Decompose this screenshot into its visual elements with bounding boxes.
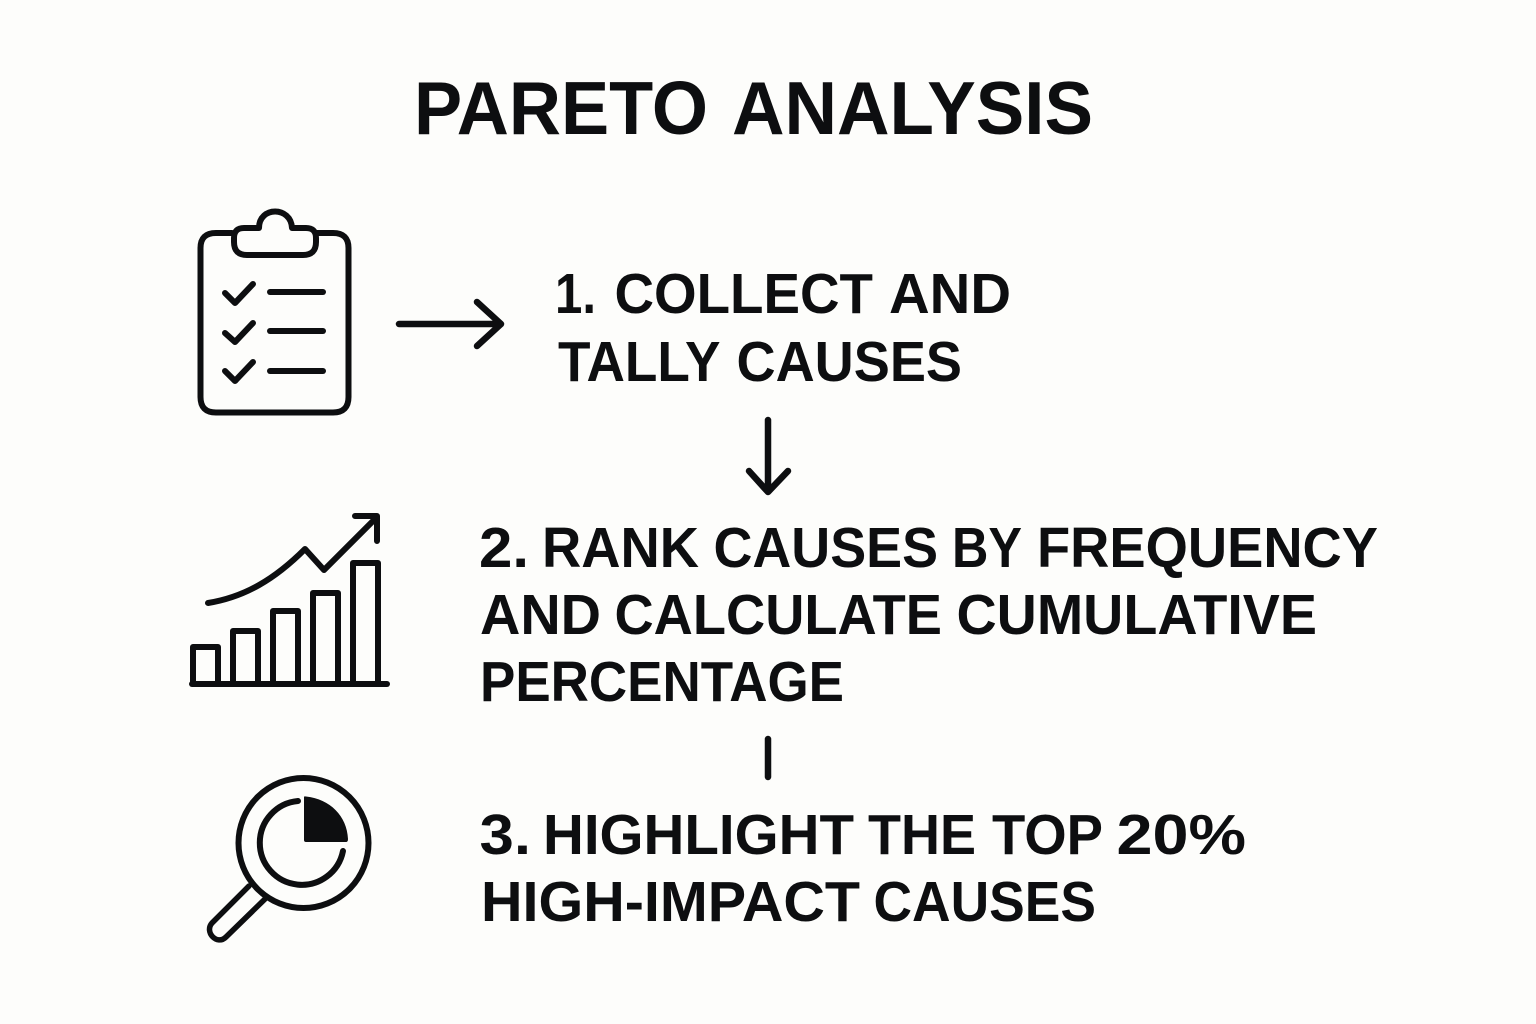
step 2 text: FREQUENCY bbox=[1037, 516, 1378, 580]
step 2 text: CAUSES bbox=[714, 516, 938, 580]
step 2 text: BY bbox=[952, 516, 1022, 580]
step 3 text bbox=[480, 803, 1246, 934]
step 1 text: 1. bbox=[555, 262, 596, 326]
step 1 text bbox=[555, 262, 1011, 394]
title: PARETO bbox=[414, 66, 708, 150]
step 3 text: HIGH-IMPACT bbox=[481, 870, 860, 934]
step 1 text: AND bbox=[889, 262, 1011, 326]
connector to step 3 bbox=[765, 739, 771, 777]
arrow: right to step 1 bbox=[399, 302, 501, 346]
step 2 text: AND bbox=[480, 583, 601, 647]
step 1 text: COLLECT bbox=[614, 262, 873, 326]
title bbox=[414, 66, 1093, 150]
step 3 text: CAUSES bbox=[874, 870, 1096, 934]
step 1 text: TALLY bbox=[558, 330, 720, 394]
title: ANALYSIS bbox=[732, 66, 1093, 150]
icon: clipboard checklist bbox=[200, 212, 348, 412]
step 3 text: TOP bbox=[992, 803, 1103, 867]
arrow: down to step 2 bbox=[749, 420, 788, 492]
step 2 text: CUMULATIVE bbox=[956, 583, 1317, 647]
step 2 text: 2. bbox=[479, 516, 529, 580]
step 3 text: HIGHLIGHT bbox=[543, 803, 854, 867]
step 3 text: 20% bbox=[1116, 803, 1246, 867]
step 3 text: 3. bbox=[480, 803, 531, 867]
step 2 text: CALCULATE bbox=[614, 583, 942, 647]
step 2 text bbox=[479, 516, 1378, 714]
step 2 text: RANK bbox=[542, 516, 699, 580]
icon: rising bar chart bbox=[192, 516, 387, 684]
step 3 text: THE bbox=[868, 803, 976, 867]
icon: magnifier with pie chart bbox=[210, 778, 368, 940]
step 1 text: CAUSES bbox=[736, 330, 962, 394]
step 2 text: PERCENTAGE bbox=[480, 650, 844, 714]
